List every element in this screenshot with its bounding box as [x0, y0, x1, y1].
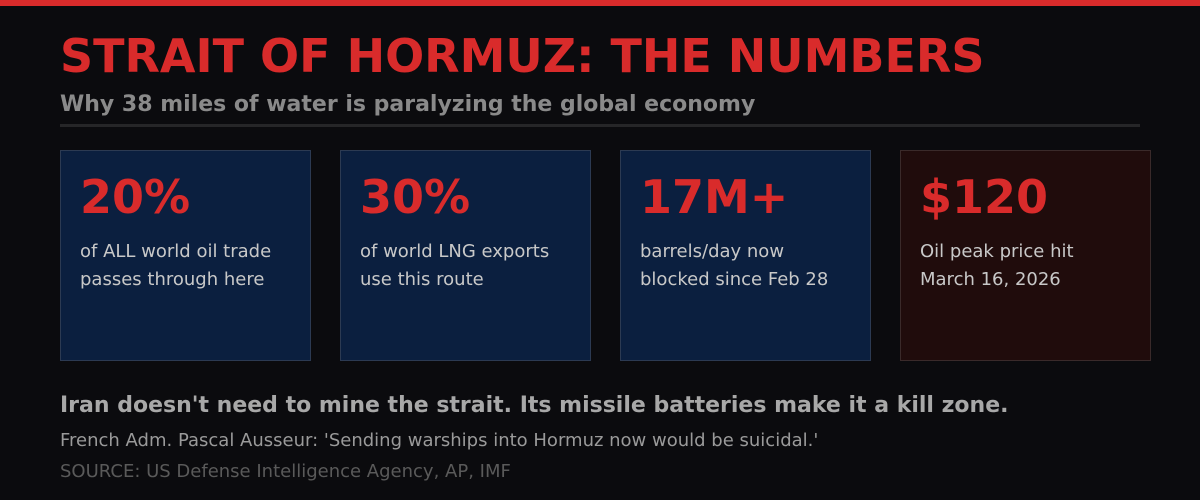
card: barrels: blocked since Feb 28	[640, 269, 828, 290]
card: oil price: Oil peak price hit	[920, 241, 1074, 262]
card: barrels: 17M+	[640, 170, 788, 224]
subtitle: Why 38 miles of water is paralyzing the global economy	[60, 92, 755, 117]
card: barrels: barrels/day now	[640, 241, 784, 262]
top red bar	[0, 0, 1200, 6]
quote: French Adm. Pascal Ausseur: 'Sending warships into Hormuz now would be suicidal.'	[60, 430, 818, 451]
card: LNG: 30%	[360, 170, 470, 224]
card: oil trade: 20%	[80, 170, 190, 224]
card: oil price: March 16, 2026	[920, 269, 1061, 290]
card: LNG: use this route	[360, 269, 484, 290]
key statement: Iran doesn't need to mine the strait. Its missile batteries make it a kill zone.	[60, 393, 1008, 418]
card: oil trade: passes through here	[80, 269, 264, 290]
card: oil price	[900, 150, 1151, 361]
card: barrels	[620, 150, 871, 361]
card: LNG	[340, 150, 591, 361]
card: oil price: $120	[920, 170, 1048, 224]
card: LNG: of world LNG exports	[360, 241, 549, 262]
card: oil trade	[60, 150, 311, 361]
card: oil trade: of ALL world oil trade	[80, 241, 271, 262]
source: SOURCE: US Defense Intelligence Agency, AP, IMF	[60, 461, 511, 482]
title: STRAIT OF HORMUZ: THE NUMBERS	[60, 29, 984, 83]
